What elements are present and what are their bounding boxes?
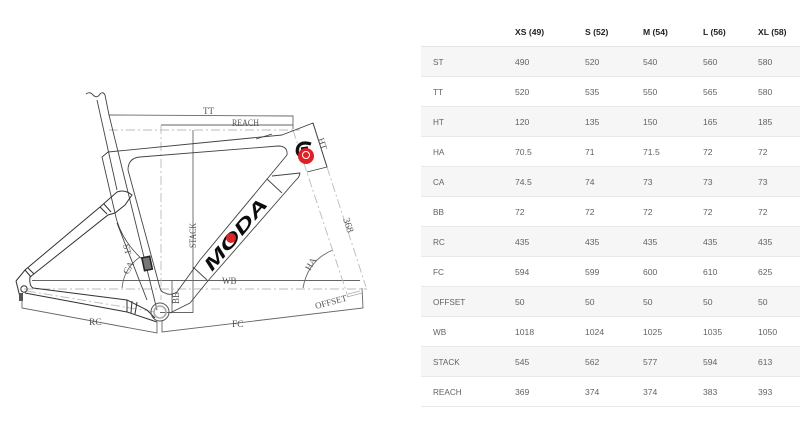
row: ST: 560 [703,57,717,67]
logo red rose on down tube [226,233,236,243]
row: BB [421,197,800,226]
row: CA: 74 [585,177,595,187]
row: FC: 594 [515,267,529,277]
row: FC: FC [433,268,444,277]
row: ST [421,47,800,76]
row: FC: 610 [703,267,717,277]
down tube logo: MODA: MODA [200,194,272,275]
dimension labels: BB [171,292,181,304]
row: ST: 520 [585,57,599,67]
row: RC: 435 [643,237,657,247]
row: HT: HT [433,118,444,127]
row: STACK: 577 [643,357,657,367]
row: STACK: 545 [515,357,529,367]
row: CA: 74.5 [515,177,532,187]
row: BB: 72 [515,207,525,217]
row: TT: 550 [643,87,657,97]
dimension labels: 368 [340,217,355,234]
row: REACH: 383 [703,387,717,397]
head tube badge [297,143,314,164]
dimension lines [22,115,363,333]
table header: M (54) [643,27,668,37]
row: REACH: 393 [758,387,772,397]
row: BB: 72 [585,207,595,217]
dimension labels: RC [89,318,102,328]
row: REACH: 374 [585,387,599,397]
row: STACK: 562 [585,357,599,367]
dimension labels: FC [232,320,244,330]
row: FC: 599 [585,267,599,277]
row: REACH: 369 [515,387,529,397]
row: HT: 150 [643,117,657,127]
row: CA: 73 [703,177,713,187]
row: CA [421,167,800,196]
row: TT: 565 [703,87,717,97]
table header [421,17,800,46]
row: CA: CA [433,178,444,187]
row: OFFSET: 50 [515,297,525,307]
dash-dot centre lines [24,125,367,312]
row: HA: HA [433,148,444,157]
row: HA: 72 [703,147,713,157]
seat stay and chain stay [16,191,157,322]
row: REACH [421,377,800,406]
row: RC: 435 [585,237,599,247]
row: STACK: 594 [703,357,717,367]
row: RC: 435 [515,237,529,247]
row: TT: 520 [515,87,529,97]
dimension labels [89,106,355,330]
row: STACK: STACK [433,358,460,367]
row: HA: 70.5 [515,147,532,157]
dimension labels: CA [122,260,137,276]
row: RC: RC [433,238,445,247]
row: RC: 435 [758,237,772,247]
table header: XS (49) [515,27,544,37]
row: RC: 435 [703,237,717,247]
row: ST: 580 [758,57,772,67]
row: OFFSET: 50 [585,297,595,307]
row: OFFSET [421,287,800,316]
row: HT: 165 [703,117,717,127]
dropout and cable port details [19,256,152,301]
row: HT: 185 [758,117,772,127]
dimension labels: ST [121,243,134,256]
row: ST: 490 [515,57,529,67]
dimension labels: HT [316,137,329,152]
dimension labels: HA [303,255,318,272]
row: REACH: 374 [643,387,657,397]
row: HA: 72 [758,147,768,157]
bottom bracket [151,303,169,321]
row: RC [421,227,800,256]
row: CA: 73 [643,177,653,187]
row: BB: 72 [758,207,768,217]
row: TT: TT [433,88,443,97]
row: HT [421,107,800,136]
row: STACK: 613 [758,357,772,367]
dimension labels: REACH [232,118,259,128]
row: ST: 540 [643,57,657,67]
row: TT [421,77,800,106]
row: REACH: REACH [433,388,462,397]
row: HA: 71 [585,147,595,157]
row: BB: BB [433,208,444,217]
row: TT: 535 [585,87,599,97]
row: TT: 580 [758,87,772,97]
row: HA [421,137,800,166]
row: HT: 135 [585,117,599,127]
row: OFFSET: 50 [703,297,713,307]
table header: L (56) [703,27,726,37]
table header: S (52) [585,27,608,37]
offset marks [347,291,362,297]
row: BB: 72 [643,207,653,217]
geometry table [421,27,800,407]
row: FC [421,257,800,286]
row: HT: 120 [515,117,529,127]
row: OFFSET: 50 [643,297,653,307]
row: WB: 1035 [703,327,722,337]
frame geometry drawing [16,92,367,334]
row: WB: 1025 [643,327,662,337]
row: ST: ST [433,58,443,67]
row: STACK [421,347,800,376]
row: FC: 625 [758,267,772,277]
dimension labels: WB [222,276,236,286]
row: WB: 1018 [515,327,534,337]
row: CA: 73 [758,177,768,187]
dimension labels: OFFSET [314,293,348,311]
row: OFFSET: 50 [758,297,768,307]
dimension labels: TT [203,106,214,116]
frame outline [86,93,327,313]
dimension labels: STACK [188,223,198,248]
row: WB: WB [433,328,446,337]
row: HA: 71.5 [643,147,660,157]
table header: XL (58) [758,27,786,37]
row: OFFSET: OFFSET [433,298,465,307]
row: WB: 1050 [758,327,777,337]
row: WB [421,317,800,346]
row: BB: 72 [703,207,713,217]
row: FC: 600 [643,267,657,277]
row: WB: 1024 [585,327,604,337]
